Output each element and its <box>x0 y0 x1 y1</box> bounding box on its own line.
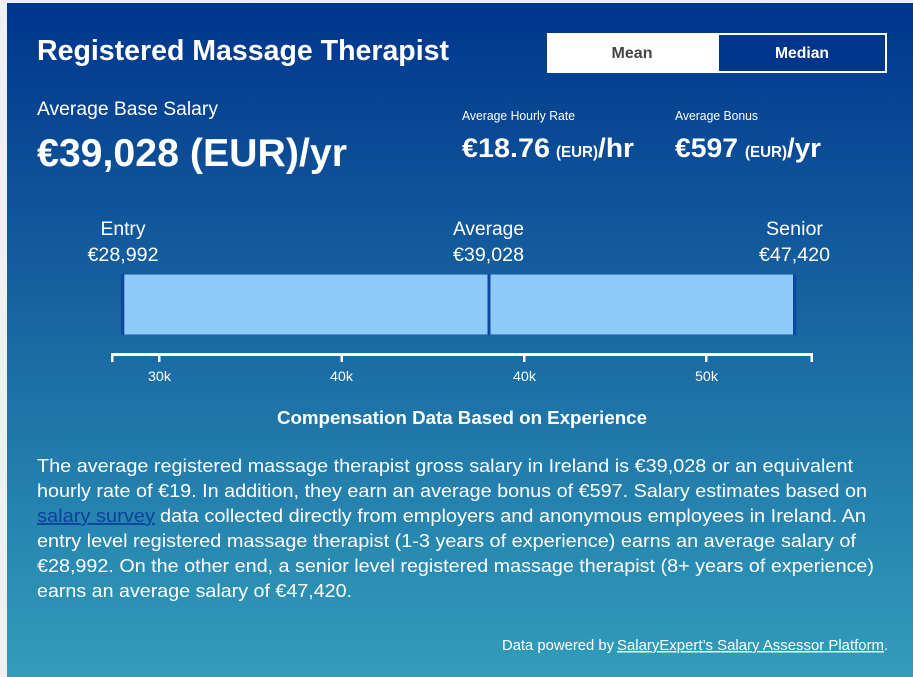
average hourly rate <box>462 109 634 163</box>
salary axis: 40k <box>513 369 536 384</box>
salary axis: 30k <box>148 369 171 384</box>
salary axis <box>111 353 813 384</box>
average base salary: €39,028 (EUR)/yr <box>37 132 347 175</box>
description paragraph: salary survey <box>37 505 156 526</box>
average hourly rate: (EUR) <box>556 144 598 161</box>
description paragraph: hourly rate of €19. In addition, they earn an average bonus of €597. Salary estimates based on <box>37 480 867 501</box>
salary axis: 50k <box>695 369 718 384</box>
toggle: mean / median: Median <box>775 45 829 62</box>
average base salary <box>37 99 347 175</box>
description paragraph: data collected directly from employers and anonymous employees in Ireland. An <box>160 505 866 526</box>
description paragraph <box>37 455 874 601</box>
chart heading: Compensation Data Based on Experience <box>277 407 647 428</box>
data source note: SalaryExpert’s Salary Assessor Platform <box>617 638 884 654</box>
label: entry: Entry <box>100 219 146 240</box>
description paragraph: €28,992. On the other end, a senior level registered massage therapist (8+ years of experience) <box>37 555 874 576</box>
label: entry: €28,992 <box>88 245 158 266</box>
label: average: Average <box>453 219 524 240</box>
average bonus: /yr <box>787 133 822 163</box>
average bonus: €597 <box>675 133 738 163</box>
average bonus: (EUR) <box>745 144 787 161</box>
description paragraph: earns an average salary of €47,420. <box>37 580 352 601</box>
label: entry <box>88 219 158 266</box>
description paragraph: entry level registered massage therapist (1-3 years of experience) earns an average salary of <box>37 530 857 551</box>
toggle: mean / median <box>547 33 887 73</box>
label: average: €39,028 <box>453 245 524 266</box>
toggle: mean / median: Mean <box>612 45 652 62</box>
label: senior: Senior <box>766 219 824 240</box>
average hourly rate: /hr <box>598 133 634 163</box>
salary axis: 40k <box>330 369 353 384</box>
label: senior: €47,420 <box>759 245 830 266</box>
average hourly rate: Average Hourly Rate <box>462 109 575 123</box>
label: average <box>453 219 524 266</box>
data source note: Data powered by <box>502 638 615 654</box>
data source note <box>502 638 888 654</box>
salary range bar <box>121 274 796 335</box>
data source note: . <box>884 638 888 654</box>
average hourly rate: €18.76 <box>462 133 550 163</box>
description paragraph: The average registered massage therapist gross salary in Ireland is €39,028 or an equivalent <box>37 455 853 476</box>
average bonus: Average Bonus <box>675 109 758 123</box>
average bonus <box>675 109 822 163</box>
title: Registered Massage Therapist <box>37 35 449 67</box>
average base salary: Average Base Salary <box>37 99 218 120</box>
label: senior <box>759 219 830 266</box>
